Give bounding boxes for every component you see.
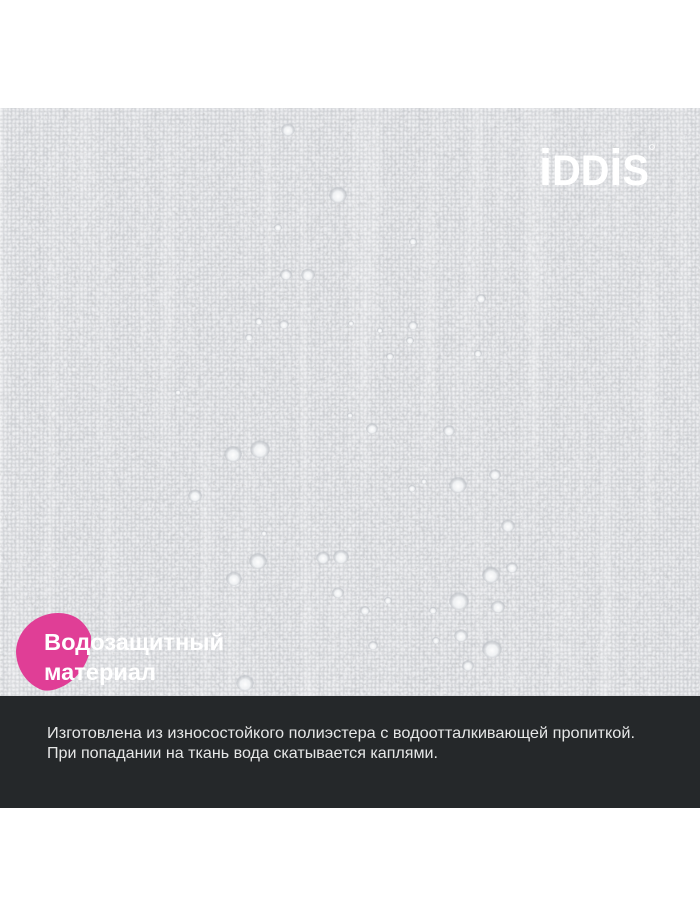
water droplets — [175, 122, 518, 691]
heading: waterproof material: Водозащитный — [44, 629, 224, 655]
description text: Изготовлена из износостойкого полиэстера с водоотталкивающей пропиткой. — [47, 725, 635, 742]
logo: IDDIS: iDDiS — [539, 139, 649, 196]
heading: waterproof material — [44, 629, 224, 685]
description text: При попадании на ткань вода скатывается каплями. — [47, 745, 438, 762]
photo: water-repellent fabric with droplets — [0, 100, 700, 704]
dark description band — [0, 696, 700, 808]
pink accent blob — [16, 613, 91, 691]
heading: waterproof material: материал — [44, 659, 156, 685]
description text — [47, 725, 635, 762]
